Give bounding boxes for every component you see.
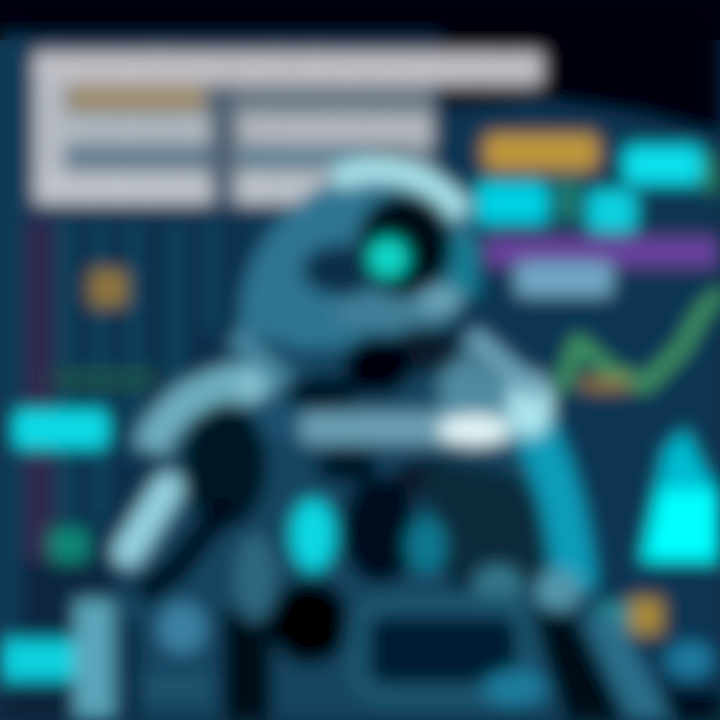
right arm stripe xyxy=(530,420,575,590)
right labels xyxy=(476,134,720,296)
bottom panel xyxy=(358,605,528,695)
title xyxy=(34,47,542,208)
eye xyxy=(368,238,408,278)
callout: cyan box xyxy=(14,410,108,448)
cyan chest glow xyxy=(291,499,335,571)
helmet xyxy=(235,165,540,410)
line chart xyxy=(562,296,720,385)
band: purple xyxy=(486,238,720,266)
chest plate xyxy=(300,412,516,444)
torso xyxy=(100,340,672,720)
mouth shadow xyxy=(389,326,461,374)
marker: blue xyxy=(666,642,714,678)
robot figure xyxy=(75,165,672,720)
label: cyan left xyxy=(476,182,548,224)
label: green tick xyxy=(556,178,580,220)
dark chest patches xyxy=(315,447,379,483)
black core xyxy=(270,580,350,664)
left callouts xyxy=(0,410,108,680)
cyan triangle chart xyxy=(640,428,720,562)
title: Benefits of Automated xyxy=(36,47,536,88)
left arm xyxy=(75,380,275,720)
label: cyan top xyxy=(624,146,702,184)
stripe: green xyxy=(704,156,720,192)
callout: green dot xyxy=(50,528,88,562)
title: Robots Bots xyxy=(42,167,352,208)
lower right details xyxy=(598,598,714,678)
title: Stock Trading xyxy=(64,110,429,148)
left chart grid xyxy=(26,220,216,560)
label: amber xyxy=(484,134,598,170)
marker: teal xyxy=(598,604,628,636)
dark column xyxy=(222,610,272,720)
bar: cyan bottom left xyxy=(0,640,78,680)
dark diagonal xyxy=(530,610,625,720)
label: pale blue xyxy=(516,262,612,296)
label: cyan small xyxy=(588,190,636,232)
marker: amber xyxy=(630,598,662,634)
